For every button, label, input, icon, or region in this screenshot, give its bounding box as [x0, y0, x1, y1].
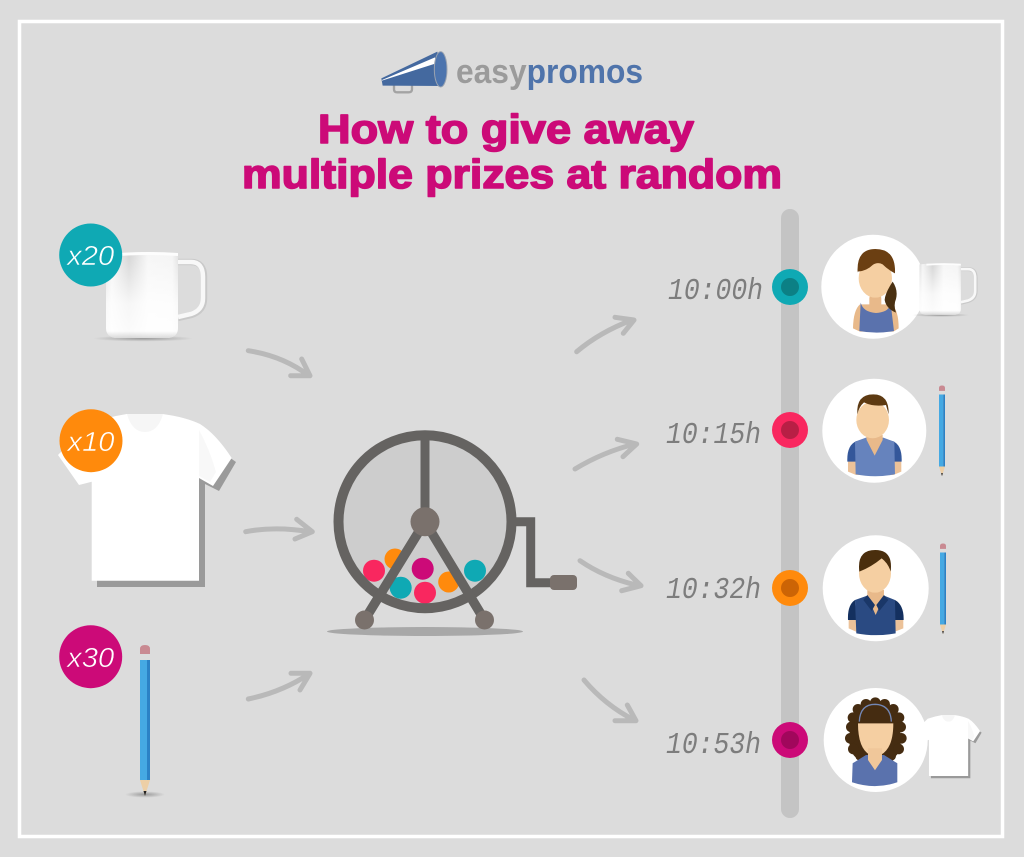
arrows: prizes into drum	[246, 351, 312, 699]
drum shadow	[327, 627, 523, 636]
logo wordmark: easypromos	[456, 53, 643, 91]
badge x30: x30	[65, 642, 115, 673]
timeline bar	[781, 209, 799, 818]
title	[242, 106, 782, 197]
badge x10: x10	[65, 426, 115, 457]
winner 4: curly-haired woman with t-shirt	[824, 688, 982, 792]
lottery drum	[327, 435, 577, 636]
prize: pencil x30	[59, 625, 165, 798]
prize: mug x20	[59, 224, 204, 342]
icon: megaphone	[381, 52, 447, 92]
timeline entry 10:15h: 10:15h	[666, 418, 761, 453]
balls	[363, 548, 486, 604]
badge x20	[59, 224, 122, 286]
timeline entry 10:32h: 10:32h	[666, 573, 761, 608]
logo: easypromos	[381, 52, 643, 92]
badge x10	[60, 409, 122, 472]
timeline entry 10:53h: 10:53h	[666, 728, 761, 763]
winner 1: woman with ponytail and mug	[821, 235, 976, 339]
winner 3: man in dark shirt with pencil	[823, 535, 946, 641]
title: multiple prizes at random	[242, 151, 782, 197]
wheel frame	[338, 435, 512, 608]
timeline entry 10:00h	[668, 269, 808, 309]
arrows: drum to winners	[575, 317, 641, 721]
title: How to give away	[318, 106, 694, 152]
timeline entry 10:15h	[666, 412, 808, 453]
prize: t-shirt x10	[58, 409, 236, 587]
timeline entry 10:00h: 10:00h	[668, 274, 763, 309]
timeline entry 10:53h	[666, 722, 808, 763]
badge x20: x20	[65, 240, 115, 271]
winner 2: man with pencil	[822, 379, 945, 483]
crank	[516, 522, 552, 583]
badge x30	[59, 625, 122, 688]
drum body	[338, 435, 512, 609]
